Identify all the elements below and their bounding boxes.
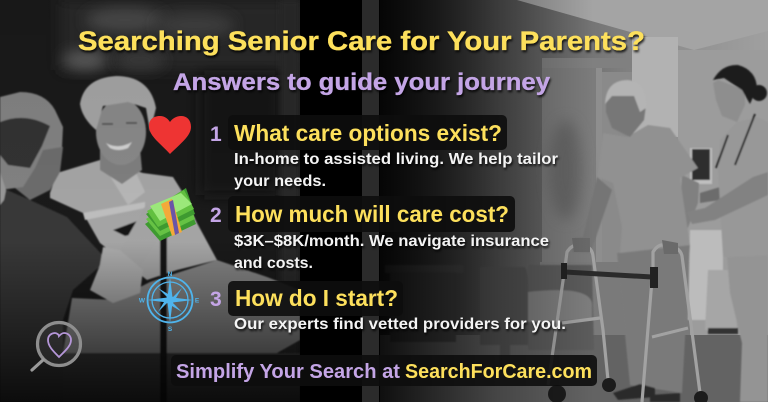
item 1: care options bbox=[210, 115, 558, 190]
item 2: cost bbox=[210, 196, 549, 272]
call to action bar: SearchForCare.com bbox=[405, 361, 592, 383]
item 1: care options: In-home to assisted living. We help tailor bbox=[234, 151, 558, 168]
call to action bar: Simplify Your Search at bbox=[176, 361, 400, 383]
icon: red heart bbox=[149, 116, 191, 154]
item 3: how to start: 3 bbox=[210, 288, 222, 311]
item 2: cost: $3K–$8K/month. We navigate insurance bbox=[234, 233, 549, 250]
background photo: man with walker and nurse bbox=[380, 0, 768, 402]
title: Searching Senior Care for Your Parents? bbox=[78, 26, 645, 56]
item 3: how to start bbox=[210, 281, 566, 333]
item 3: how to start: How do I start? bbox=[235, 285, 398, 311]
icon: compass bbox=[139, 271, 200, 333]
subtitle: Answers to guide your journey bbox=[173, 69, 551, 96]
icon: compass: W bbox=[139, 298, 146, 304]
item 1: care options: What care options exist? bbox=[234, 120, 502, 146]
item 2: cost: How much will care cost? bbox=[235, 201, 509, 227]
background photo: black centre band bbox=[300, 0, 384, 402]
item 1: care options: your needs. bbox=[234, 173, 326, 190]
icon: stack of money bbox=[145, 188, 196, 241]
item 2: cost: and costs. bbox=[234, 255, 313, 272]
icon: magnifier with heart logo bbox=[32, 322, 80, 370]
item 3: how to start: Our experts find vetted providers for you. bbox=[234, 316, 566, 333]
icon: compass: S bbox=[168, 326, 173, 333]
icon: compass: E bbox=[195, 298, 200, 304]
icon: compass: N bbox=[168, 271, 173, 278]
background photo: seniors at table bbox=[0, 0, 300, 402]
call to action bar bbox=[171, 355, 597, 386]
item 1: care options: 1 bbox=[210, 123, 222, 146]
item 2: cost: 2 bbox=[210, 204, 222, 227]
